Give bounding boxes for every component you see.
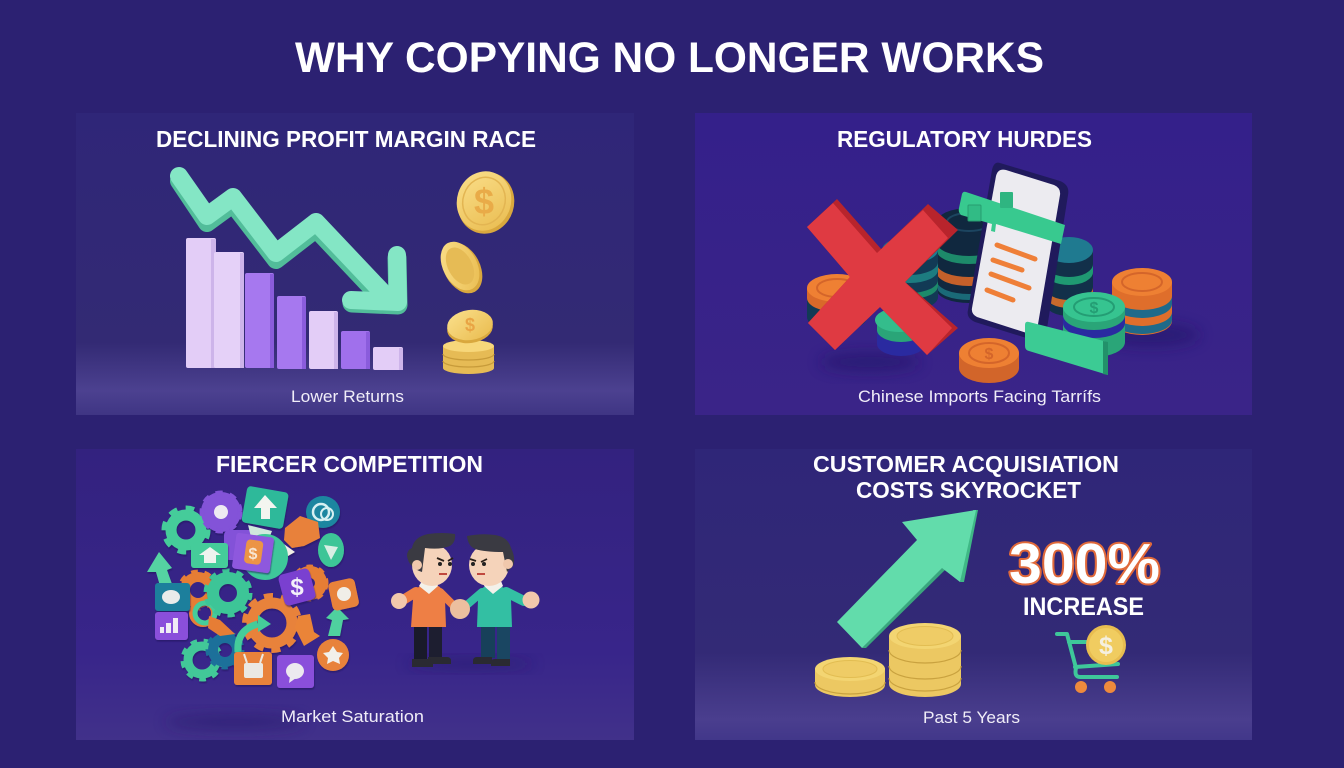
panel: customer acquisition costs xyxy=(695,449,1252,740)
heading: customer acquisiation costs skyrocket xyxy=(813,451,1119,503)
bar chart: declining bars xyxy=(186,238,403,370)
icon: stacks of tariff coins: $ xyxy=(1090,300,1099,317)
panel: fiercer competition xyxy=(76,449,634,740)
heading: customer acquisiation costs skyrocket: COSTS SKYROCKET xyxy=(856,477,1081,503)
arrow: downward trend xyxy=(179,176,398,305)
stat: 300 percent: 300% xyxy=(1009,532,1160,596)
caption: chinese imports facing tariffs: Chinese Imports Facing Tarrífs xyxy=(858,387,1101,406)
figure: left competitor xyxy=(391,533,455,667)
caption: market saturation: Market Saturation xyxy=(281,707,424,726)
figures: two competitors facing off xyxy=(391,533,540,669)
icon: shopping cart with coin xyxy=(1057,625,1126,693)
panel: regulatory hurdles xyxy=(695,113,1252,415)
icon cluster: gears and app icons xyxy=(147,486,360,730)
figure: right competitor xyxy=(450,534,540,666)
panel: declining profit margin race xyxy=(76,113,634,415)
heading: regulatory hurdes: REGULATORY HURDES xyxy=(837,126,1092,152)
caption: lower returns: Lower Returns xyxy=(291,387,404,406)
arrow: rising costs xyxy=(837,510,978,648)
icon cluster: gears and app icons: $ xyxy=(249,546,258,563)
icon: falling coins xyxy=(433,164,522,374)
icon: falling coins: $ xyxy=(474,181,494,222)
icon: shopping cart with coin: $ xyxy=(1099,632,1113,660)
heading: customer acquisiation costs skyrocket: CUSTOMER ACQUISIATION xyxy=(813,451,1119,477)
icon: falling coins: $ xyxy=(465,315,475,335)
icon: gold coin stacks xyxy=(815,623,961,697)
icon: front orange coin xyxy=(959,338,1019,383)
label: increase: INCREASE xyxy=(1023,593,1144,621)
title: WHY COPYING NO LONGER WORKS xyxy=(295,34,1044,82)
icon: smartphone checklist xyxy=(959,163,1108,375)
icon: front orange coin: $ xyxy=(985,346,994,363)
icon: stacks of tariff coins xyxy=(807,208,1200,372)
icon cluster: gears and app icons: $ xyxy=(290,574,304,601)
heading: declining profit margin race: DECLINING PROFIT MARGIN RACE xyxy=(156,126,536,152)
icon: red cross xyxy=(807,199,958,355)
heading: fiercer competition: FIERCER COMPETITION xyxy=(216,451,483,477)
caption: past 5 years: Past 5 Years xyxy=(923,708,1020,727)
